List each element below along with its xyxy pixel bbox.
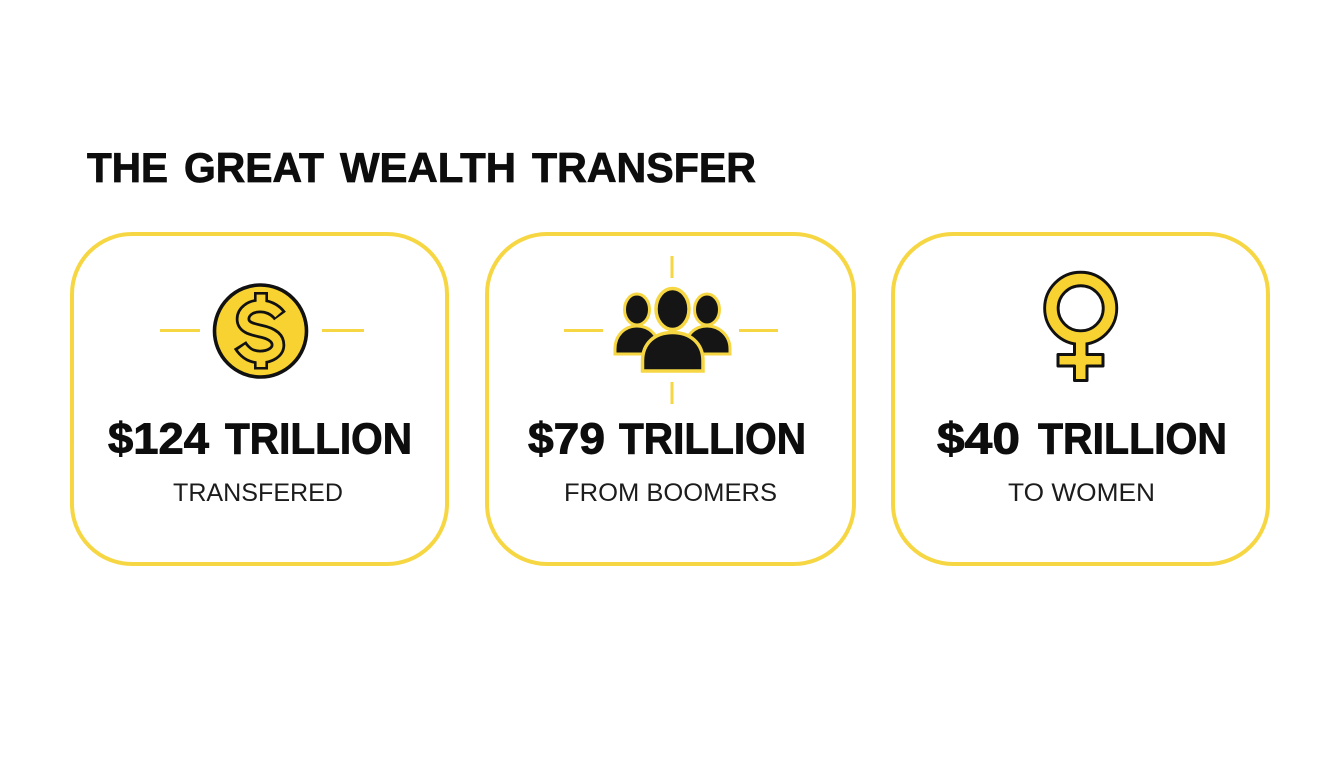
- panel: $79 trillion from boomers: [487, 234, 854, 564]
- icon: group of people: [564, 256, 778, 404]
- stat: $40 trillion: TRILLION: [1038, 414, 1227, 464]
- icon: female symbol: [1051, 279, 1110, 380]
- panel: $40 trillion to women: [893, 234, 1268, 564]
- title: GREAT: [184, 144, 324, 191]
- stat: $79 trillion: TRILLION: [619, 414, 806, 464]
- stat: $124 trillion: $124: [108, 414, 210, 464]
- stat: $79 trillion: $79: [528, 414, 605, 464]
- title: TRANSFER: [532, 144, 756, 191]
- title: WEALTH: [340, 144, 516, 191]
- stat: $79 trillion: [528, 414, 806, 464]
- label: transfered: TRANSFERED: [173, 479, 343, 507]
- stat: $124 trillion: [108, 414, 412, 464]
- title: [87, 144, 756, 191]
- icon: dollar coin: [160, 285, 364, 377]
- title: THE: [87, 144, 168, 191]
- label: to women: TO WOMEN: [1008, 479, 1155, 507]
- stat: $40 trillion: [937, 414, 1227, 464]
- panel: $124 trillion transferred: [72, 234, 447, 564]
- stat: $124 trillion: TRILLION: [225, 414, 412, 464]
- stat: $40 trillion: $40: [937, 414, 1020, 464]
- label: from boomers: FROM BOOMERS: [564, 479, 777, 507]
